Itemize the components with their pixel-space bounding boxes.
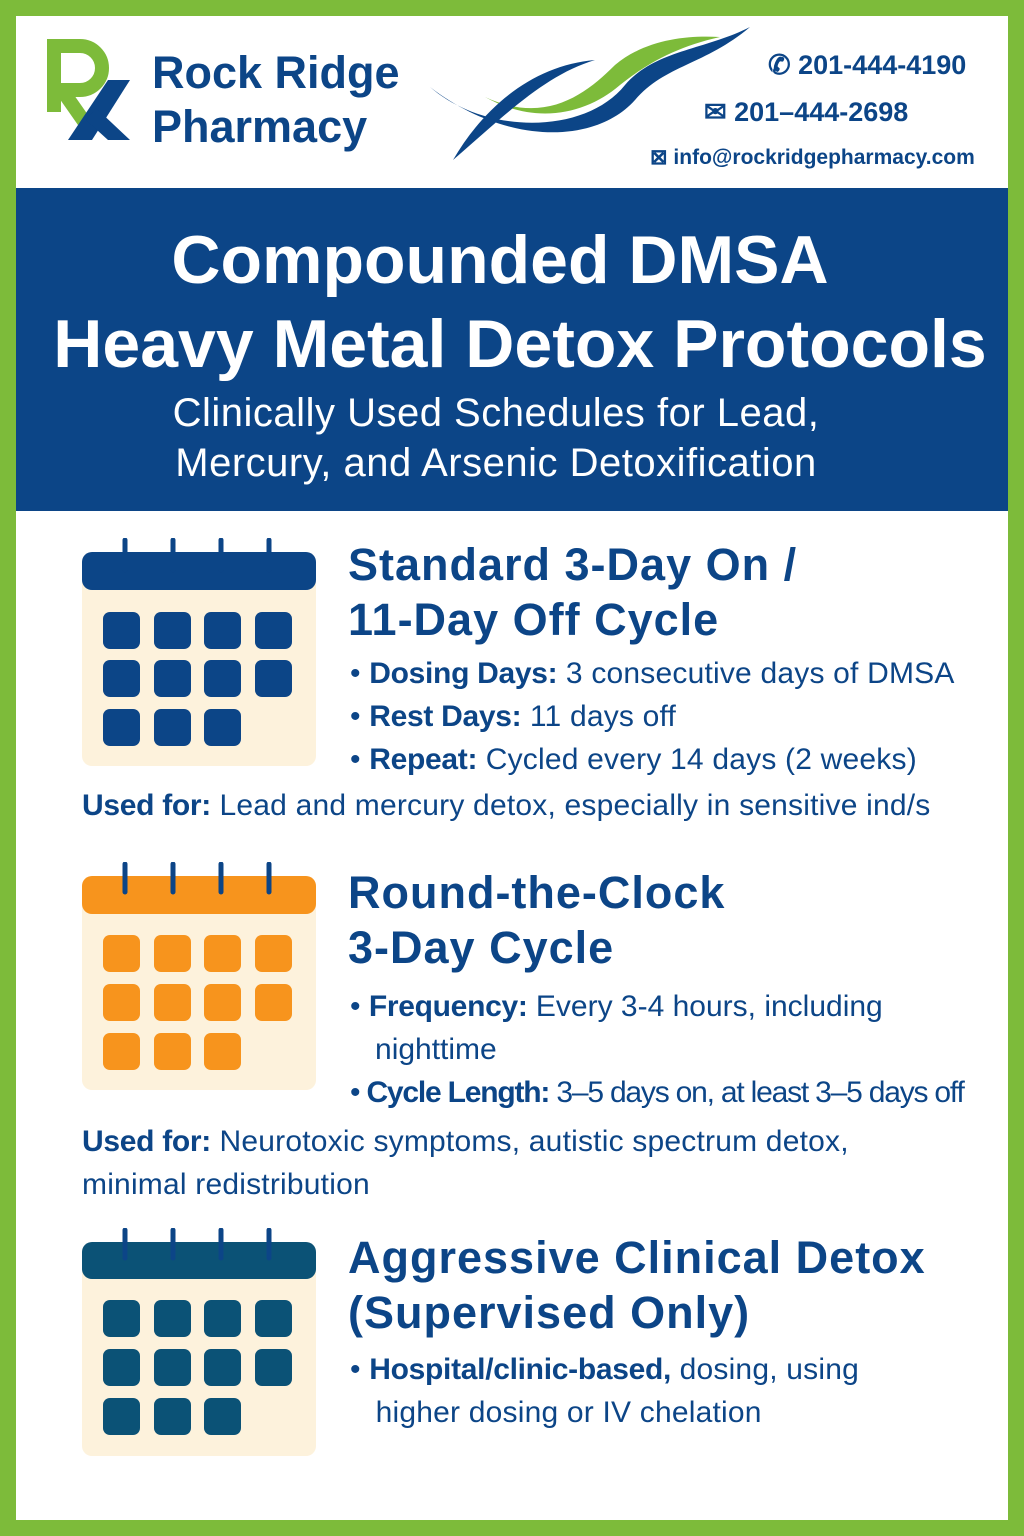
title banner: Clinically Used Schedules for Lead, — [173, 391, 819, 435]
title banner: Heavy Metal Detox Protocols — [53, 306, 987, 382]
section 2 heading — [348, 867, 725, 973]
title banner: Mercury, and Arsenic Detoxification — [175, 441, 817, 485]
section 2 heading: Round-the-Clock — [348, 867, 725, 918]
section 1 bullets: • Repeat: Cycled every 14 days (2 weeks) — [350, 743, 917, 776]
section 1 bullets — [350, 657, 955, 776]
section 1 bullets: • Dosing Days: 3 consecutive days of DMSA — [350, 657, 955, 690]
section 1 used for: Used for: Lead and mercury detox, especially in sensitive ind/s — [82, 789, 930, 822]
section 1 heading — [348, 539, 797, 645]
section 2 calendar icon — [82, 862, 316, 1090]
section 3 heading: (Supervised Only) — [348, 1287, 750, 1338]
title banner: Compounded DMSA — [171, 222, 829, 298]
section 1 heading: 11-Day Off Cycle — [348, 594, 719, 645]
section 2 bullets: • Frequency: Every 3-4 hours, including — [350, 990, 883, 1023]
section 2 used for: Used for: Neurotoxic symptoms, autistic spectrum detox, — [82, 1125, 849, 1158]
section 3 calendar icon — [82, 1228, 316, 1456]
section 2 used for — [82, 1125, 849, 1201]
section 1 bullets: • Rest Days: 11 days off — [350, 700, 676, 733]
contact info: ⊠ info@rockridgepharmacy.com — [650, 146, 975, 169]
section 3 bullets — [350, 1353, 859, 1429]
section 2 bullets: • Cycle Length: 3–5 days on, at least 3–5 days off — [350, 1076, 964, 1109]
section 2 used for: minimal redistribution — [82, 1168, 370, 1201]
brand name — [152, 47, 400, 152]
section 1 heading: Standard 3-Day On / — [348, 539, 797, 590]
section 3 heading — [348, 1232, 926, 1338]
section 2 heading: 3-Day Cycle — [348, 922, 614, 973]
contact info: ✉ 201–444-2698 — [704, 97, 908, 127]
section 3 bullets: higher dosing or IV chelation — [376, 1396, 762, 1429]
section 2 bullets — [350, 990, 965, 1109]
brand name: Pharmacy — [152, 101, 367, 152]
section 3 bullets: • Hospital/clinic-based, dosing, using — [350, 1353, 859, 1386]
brand name: Rock Ridge — [152, 47, 400, 98]
contact info — [650, 50, 975, 169]
title banner — [16, 188, 1008, 511]
section 2 bullets: nighttime — [375, 1033, 497, 1066]
section 3 heading: Aggressive Clinical Detox — [348, 1232, 926, 1283]
section 1 calendar icon — [82, 538, 316, 766]
logo swoosh — [430, 27, 750, 160]
contact info: ✆ 201-444-4190 — [768, 50, 966, 80]
logo: Rx — [47, 39, 130, 140]
